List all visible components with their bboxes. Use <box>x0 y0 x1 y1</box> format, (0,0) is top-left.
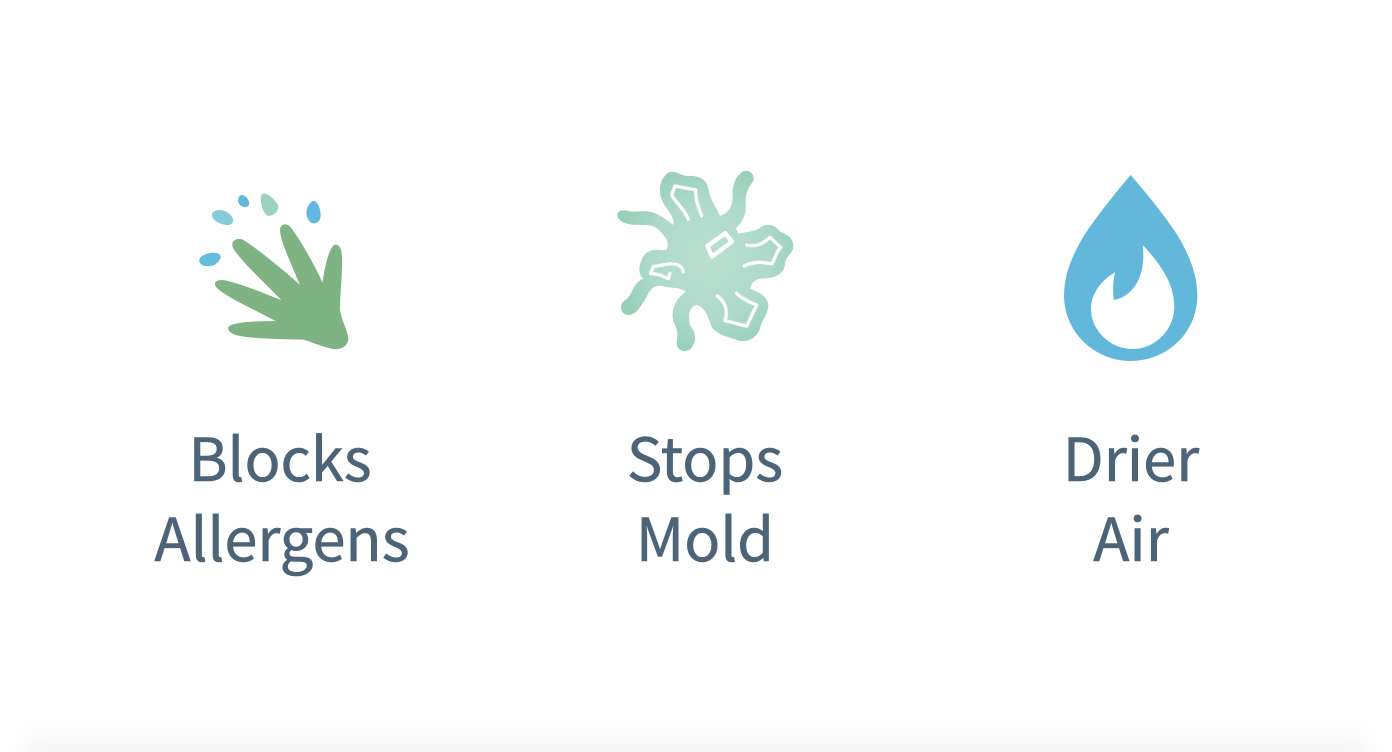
icon: leaf with pollen <box>199 193 348 348</box>
icon: mold spore <box>617 171 793 351</box>
label: Stops Mold: Mold <box>636 493 774 579</box>
column: stops mold <box>617 171 793 579</box>
label: Drier Air: Air <box>1093 493 1170 579</box>
column: drier air <box>1063 175 1200 579</box>
label: Stops Mold: Stops <box>627 413 783 499</box>
droplet <box>1064 175 1197 361</box>
leaf <box>216 225 348 348</box>
label: Blocks Allergens <box>154 413 410 579</box>
white outlines <box>651 186 781 326</box>
flame <box>1091 245 1174 349</box>
column: blocks allergens <box>154 193 410 579</box>
label: Blocks Allergens: Allergens <box>154 493 410 579</box>
label: Stops Mold <box>627 413 783 579</box>
label: Drier Air: Drier <box>1063 413 1200 499</box>
pollen droplets <box>199 193 321 266</box>
mold body <box>617 171 793 351</box>
icon: droplet with flame <box>1064 175 1197 361</box>
label: Blocks Allergens: Blocks <box>188 413 372 499</box>
label: Drier Air <box>1063 413 1200 579</box>
